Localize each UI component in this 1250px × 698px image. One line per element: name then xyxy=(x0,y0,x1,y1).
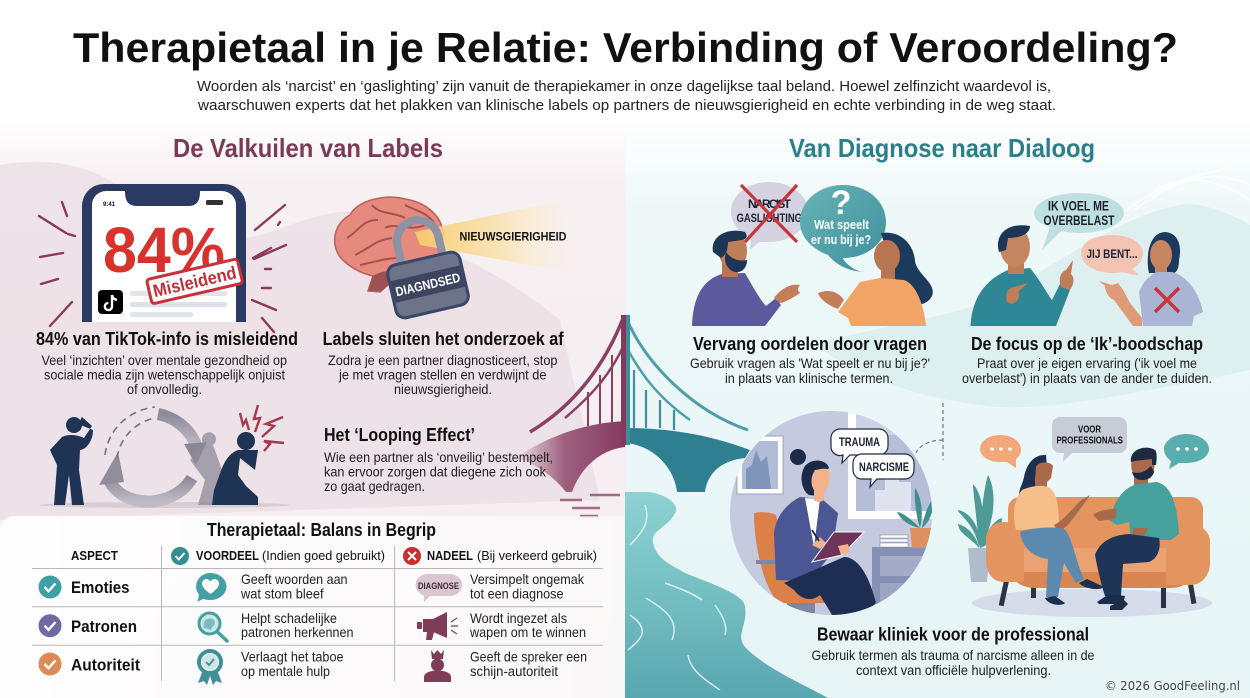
bridge: right teal half xyxy=(625,315,750,492)
row: Emoties: Emoties xyxy=(71,578,130,597)
label: NARCISME xyxy=(853,454,914,487)
icon: loop arrows xyxy=(99,407,207,502)
background: top-right swirl lines xyxy=(1120,168,1250,215)
icon: magnifier xyxy=(199,613,227,641)
heading: left column: De Valkuilen van Labels xyxy=(173,133,443,163)
icon: teal check xyxy=(38,576,62,598)
icon: padlock DIAGNOSED: DIAGNDSED xyxy=(394,270,462,299)
icon: couch xyxy=(986,497,1210,608)
icon: light teal bubble xyxy=(1034,193,1124,250)
text: labels heading: Labels sluiten het onderzoek af xyxy=(323,328,564,349)
icon: professionals bubble xyxy=(1052,417,1127,462)
text: TikTok body xyxy=(42,352,287,397)
icon: orange check xyxy=(38,652,62,676)
icon: pink bubble: JIJ BENT... xyxy=(1086,247,1138,261)
bridge: tower xyxy=(621,315,626,445)
row: Autoriteit xyxy=(38,648,587,685)
table header: (Bij verkeerd gebruik) xyxy=(477,548,597,563)
label: TRAUMA xyxy=(831,429,888,463)
icon: ribbon badge xyxy=(197,649,223,685)
icon: orange speech bubble xyxy=(980,435,1021,468)
icon: teal bubble: ? xyxy=(831,184,851,222)
label: TRAUMA: TRAUMA xyxy=(839,435,880,449)
intro text: waarschuwen experts dat het plakken van klinische labels op partners de nieuwsgierigheid en echte verbinding in de weg staat. xyxy=(197,97,1056,114)
text: I-message body: Praat over je eigen ervaring ('ik voel me xyxy=(977,355,1197,371)
icon: light beam xyxy=(415,198,573,273)
heading: right column: Van Diagnose naar Dialoog xyxy=(789,133,1095,163)
intro text: Woorden als ‘narcist’ en ‘gaslighting’ zijn vanuit de therapiekamer in onze dagelijkse taal beland. Hoewel zelfinzicht waardevol is, xyxy=(197,78,1051,95)
row: Patronen: patronen herkennen xyxy=(241,624,354,640)
icon: light teal bubble: IK VOEL ME xyxy=(1048,198,1109,214)
row: Patronen: Patronen xyxy=(71,617,137,636)
icon: brain xyxy=(335,197,443,292)
row: Autoriteit: Verlaagt het taboe xyxy=(241,648,344,664)
icon: kneeling person xyxy=(212,432,258,505)
icon: man xyxy=(692,231,800,326)
icon: woman with cross xyxy=(1099,232,1203,326)
panel: therapist scene xyxy=(725,403,943,618)
icon: ground shadows xyxy=(40,502,290,508)
text: I-message body xyxy=(962,355,1212,386)
row: Emoties: tot een diagnose xyxy=(470,586,564,602)
row: Emoties: Geeft woorden aan xyxy=(241,571,348,587)
icon: heart bubble xyxy=(196,573,226,602)
icon: man xyxy=(1093,448,1179,610)
bridge xyxy=(515,315,750,516)
background: right teal wave xyxy=(815,204,1250,407)
row: Patronen: wapen om te winnen xyxy=(469,624,586,640)
table header: VOORDEEL xyxy=(196,548,259,563)
illustration: office circle xyxy=(725,405,938,618)
text: questions body xyxy=(690,355,930,386)
icon: teal bubble: er nu bij je? xyxy=(811,232,871,247)
icon: woman xyxy=(818,233,933,326)
table header: NADEEL xyxy=(427,548,473,563)
panel: questions instead of judgements xyxy=(690,182,933,386)
text: labels body: Zodra je een partner diagnosticeert, stop xyxy=(328,352,558,368)
icon: warning sparks xyxy=(39,202,286,332)
icon: cross xyxy=(403,547,421,565)
row: Autoriteit: Geeft de spreker een xyxy=(470,648,587,664)
icon: megaphone xyxy=(417,612,458,640)
text: TikTok heading: 84% van TikTok-info is misleidend xyxy=(36,328,298,349)
icon: standing person xyxy=(50,417,93,505)
title: Therapietaal in je Relatie: Verbinding of Veroordeling? xyxy=(73,24,1178,71)
panel: looping effect xyxy=(40,405,553,508)
icon: man pointing xyxy=(970,225,1074,326)
icon: purple check xyxy=(38,614,62,637)
icon: teal speech bubble xyxy=(1164,434,1209,469)
panel: TikTok statistic xyxy=(36,184,298,397)
icon: phone xyxy=(82,184,246,322)
text: labels body: je met vragen stellen en verdwijnt de xyxy=(338,366,547,382)
text: professional body xyxy=(812,647,1095,678)
icon: red cross xyxy=(741,185,797,242)
bridge: left plum half xyxy=(515,316,625,516)
text: I-message heading: De focus op de ‘Ik’-boodschap xyxy=(971,333,1203,354)
icon: padlock DIAGNOSED xyxy=(377,212,470,320)
table header xyxy=(71,547,597,565)
table header: (Indien goed gebruikt) xyxy=(262,548,385,563)
text: professional body: Gebruik termen als trauma of narcisme alleen in de xyxy=(812,647,1095,663)
text: professional body: context van officiële hulpverlening. xyxy=(856,662,1051,678)
row: Emoties: Versimpelt ongemak xyxy=(470,571,585,587)
icon: diagnose bubble: DIAGNOSE xyxy=(418,581,459,591)
text: questions body: Gebruik vragen als 'Wat speelt er nu bij je?' xyxy=(690,355,930,371)
icon: dashed connector xyxy=(916,403,943,460)
background: left half xyxy=(0,0,625,698)
table background xyxy=(0,516,625,698)
label: NARCISME: NARCISME xyxy=(859,460,909,474)
text: I-message body: overbelast') in plaats van de ander te duiden. xyxy=(962,370,1212,386)
text: questions body: in plaats van klinische termen. xyxy=(725,370,893,386)
river xyxy=(625,492,828,698)
panel: comparison table xyxy=(0,516,625,698)
text: looping body: Wie een partner als ‘onveilig’ bestempelt, xyxy=(324,449,553,465)
text: labels body: nieuwsgierigheid. xyxy=(394,381,492,397)
icon: pink bubble xyxy=(1081,235,1143,275)
text: professional heading: Bewaar kliniek voor de professional xyxy=(817,624,1089,644)
text: looping body xyxy=(324,449,553,494)
icon: lightning bolts xyxy=(240,405,284,451)
icon: phone: 9:41 xyxy=(103,202,116,208)
text: looping body: kan ervoor zorgen dat diegene zich ook xyxy=(324,464,547,480)
icon: gray bubble: NARCIST xyxy=(748,197,792,211)
icon: professionals bubble: VOOR xyxy=(1078,424,1102,436)
big number 84%: 84% xyxy=(103,214,225,286)
icon: light teal bubble: OVERBELAST xyxy=(1044,213,1115,228)
icon: woman xyxy=(1014,455,1104,605)
label: NIEUWSGIERIGHEID: NIEUWSGIERIGHEID xyxy=(460,230,567,244)
text: TikTok body: of onvolledig. xyxy=(127,381,202,397)
text: TikTok body: sociale media zijn wetenschappelijk onjuist xyxy=(44,366,285,382)
icon: teal bubble xyxy=(800,184,886,272)
row: Autoriteit: Autoriteit xyxy=(71,656,140,674)
text: questions heading: Vervang oordelen door vragen xyxy=(693,333,927,354)
text: looping body: zo gaat gedragen. xyxy=(324,478,425,494)
icon: ghost person xyxy=(190,432,222,505)
intro text xyxy=(197,78,1056,114)
icon: check xyxy=(171,547,189,565)
icon: diagnose bubble xyxy=(416,574,462,602)
text: labels body xyxy=(328,352,558,397)
icon: crowned person xyxy=(424,650,451,682)
row: Autoriteit: op mentale hulp xyxy=(241,663,330,679)
icon: floor shadow xyxy=(972,589,1212,617)
row: Patronen xyxy=(38,610,586,641)
stamp: Misleidend: Misleidend xyxy=(151,263,238,301)
panel: I-message xyxy=(962,193,1212,386)
row: Autoriteit: schijn-autoriteit xyxy=(470,663,558,679)
row: Emoties xyxy=(38,571,585,602)
text: looping heading: Het ‘Looping Effect’ xyxy=(324,424,475,445)
table title: Therapietaal: Balans in Begrip xyxy=(207,520,436,540)
table grid xyxy=(32,546,603,681)
icon: TikTok logo xyxy=(98,290,123,314)
row: Patronen: Helpt schadelijke xyxy=(241,610,337,626)
icon: potted plant xyxy=(958,475,1002,582)
background: left pink wave xyxy=(0,162,600,520)
row: Emoties: wat stom bleef xyxy=(240,586,324,602)
row: Patronen: Wordt ingezet als xyxy=(470,610,567,626)
icon: gray bubble xyxy=(731,182,808,250)
panel: couple on couch xyxy=(958,417,1212,617)
text: TikTok body: Veel ‘inzichten’ over mentale gezondheid op xyxy=(42,352,287,368)
icon: professionals bubble: PROFESSIONALS xyxy=(1056,436,1123,446)
table header: ASPECT xyxy=(71,548,118,563)
panel: labels close inquiry xyxy=(323,197,573,397)
background: right half xyxy=(625,0,1250,698)
icon: gray bubble: GASLIGHTING xyxy=(736,211,802,225)
icon: teal bubble: Wat speelt xyxy=(814,217,870,232)
copyright: © 2026 GoodFeeling.nl xyxy=(1105,679,1240,693)
